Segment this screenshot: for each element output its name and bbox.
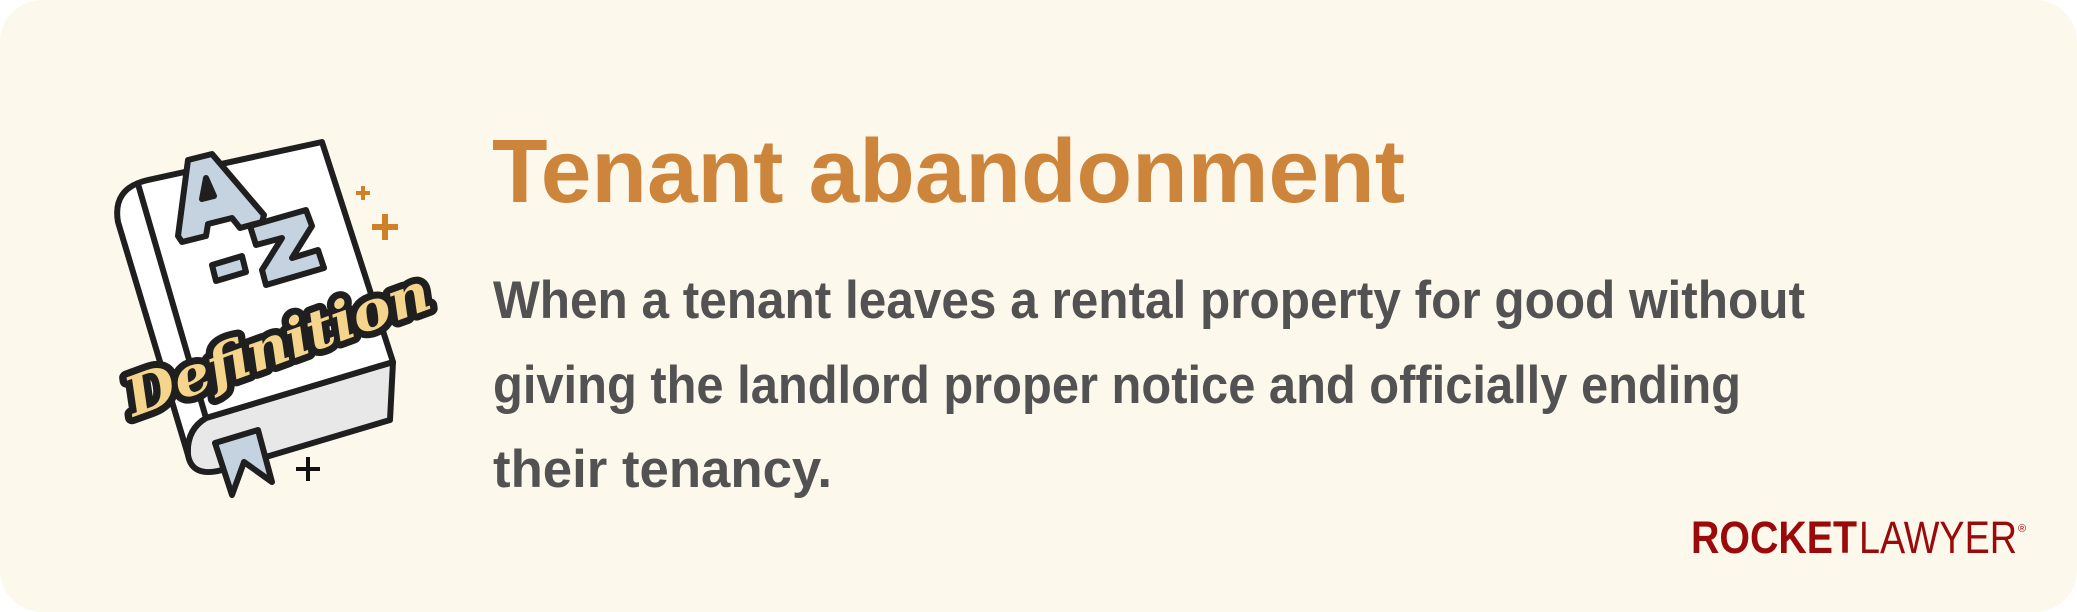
logo: Rocket Lawyer: ® <box>2018 523 2026 535</box>
body text: their tenancy. <box>493 440 832 499</box>
logo: Rocket Lawyer: LAWYER <box>1859 512 2017 563</box>
logo: Rocket Lawyer <box>1691 512 2026 563</box>
icon: definition book <box>117 142 393 495</box>
icon label: Definition script: Definition <box>114 259 439 430</box>
book cover <box>117 142 393 455</box>
letter A <box>178 154 264 242</box>
body text: giving the landlord proper notice and officially ending <box>493 356 1741 415</box>
dash <box>212 256 246 281</box>
bookmark <box>215 430 272 495</box>
body text <box>493 271 1805 499</box>
body text: When a tenant leaves a rental property for good without <box>493 271 1805 330</box>
letter Z <box>250 210 324 285</box>
title: Tenant abandonment <box>492 122 1405 222</box>
book pages bottom <box>188 362 393 472</box>
logo: Rocket Lawyer: ROCKET <box>1691 512 1857 563</box>
sparkles <box>356 186 398 240</box>
